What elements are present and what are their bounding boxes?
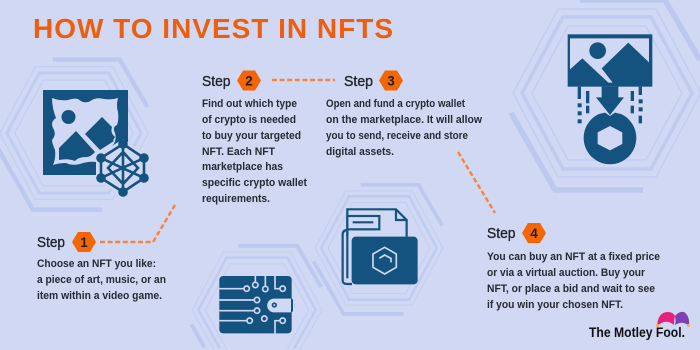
arrow: step 3 to 4 connector xyxy=(458,152,495,213)
step 2 body: of crypto is needed xyxy=(202,114,296,126)
step 2 body: NFT. Each NFT xyxy=(202,146,275,158)
step 2 block xyxy=(202,70,307,205)
logo: The Motley Fool: The Motley Fool. xyxy=(589,324,685,340)
step 1 body: Choose an NFT you like: xyxy=(37,258,156,270)
hexagon backdrop: top right icon xyxy=(511,0,700,190)
step 2 badge: 2 xyxy=(245,74,253,88)
step 2 body: to buy your targeted xyxy=(202,130,301,142)
icon: picture converted to NFT xyxy=(568,34,652,164)
step 4 badge: 4 xyxy=(530,226,538,241)
step 4 body: if you win your chosen NFT. xyxy=(487,299,623,311)
icon: jester hat xyxy=(656,312,690,327)
step 3 badge xyxy=(379,70,403,90)
step 3 body: on the marketplace. It will allow xyxy=(326,114,482,126)
step 4 body: or via a virtual auction. Buy your xyxy=(487,267,646,279)
hexagon backdrop: step 1 icon xyxy=(0,60,148,210)
step 3 block xyxy=(326,70,482,158)
step 4 block xyxy=(487,223,660,311)
step 3 body xyxy=(326,98,482,158)
hexagon backdrop: wallet icon xyxy=(192,246,322,349)
step 2 body: marketplace has xyxy=(202,161,283,173)
step 3 body: you to send, receive and store xyxy=(326,130,468,142)
step 1 label: Step xyxy=(37,235,65,251)
step 4 body: You can buy an NFT at a fixed price xyxy=(487,251,660,263)
hexagon backdrop: folder icon xyxy=(314,185,443,314)
step 2 body: specific crypto wallet xyxy=(202,177,307,189)
arrow: step 1 to 2 connector xyxy=(100,205,175,242)
icon: digital wallet xyxy=(219,276,295,333)
arrow: step 2 to 3 connector xyxy=(272,79,335,81)
step 2 label: Step xyxy=(202,74,230,90)
icon: NFT folder xyxy=(343,209,418,284)
step 3 label: Step xyxy=(344,74,373,90)
step 3 body: digital assets. xyxy=(326,146,394,158)
step 4 body: NFT, or place a bid and wait to see xyxy=(487,283,655,295)
step 1 block xyxy=(37,232,166,302)
step 4 badge xyxy=(522,223,546,243)
step 3 badge: 3 xyxy=(387,74,395,88)
logo: The Motley Fool xyxy=(589,312,690,340)
step 2 body: Find out which type xyxy=(202,98,297,110)
step 4 body xyxy=(487,251,660,311)
step 2 body xyxy=(202,98,307,205)
icon: network node xyxy=(96,139,149,197)
wallet clasp xyxy=(267,297,295,313)
step 1 body: a piece of art, music, or an xyxy=(37,274,166,286)
step 2 body: requirements. xyxy=(202,193,270,205)
icon: picture with network xyxy=(43,90,149,197)
step 1 body: item within a video game. xyxy=(37,290,162,302)
title: HOW TO INVEST IN NFTS xyxy=(33,13,393,44)
step 1 body xyxy=(37,258,166,302)
step 4 label: Step xyxy=(487,226,516,242)
step 1 badge: 1 xyxy=(80,235,88,250)
step 3 body: Open and fund a crypto wallet xyxy=(326,98,465,110)
